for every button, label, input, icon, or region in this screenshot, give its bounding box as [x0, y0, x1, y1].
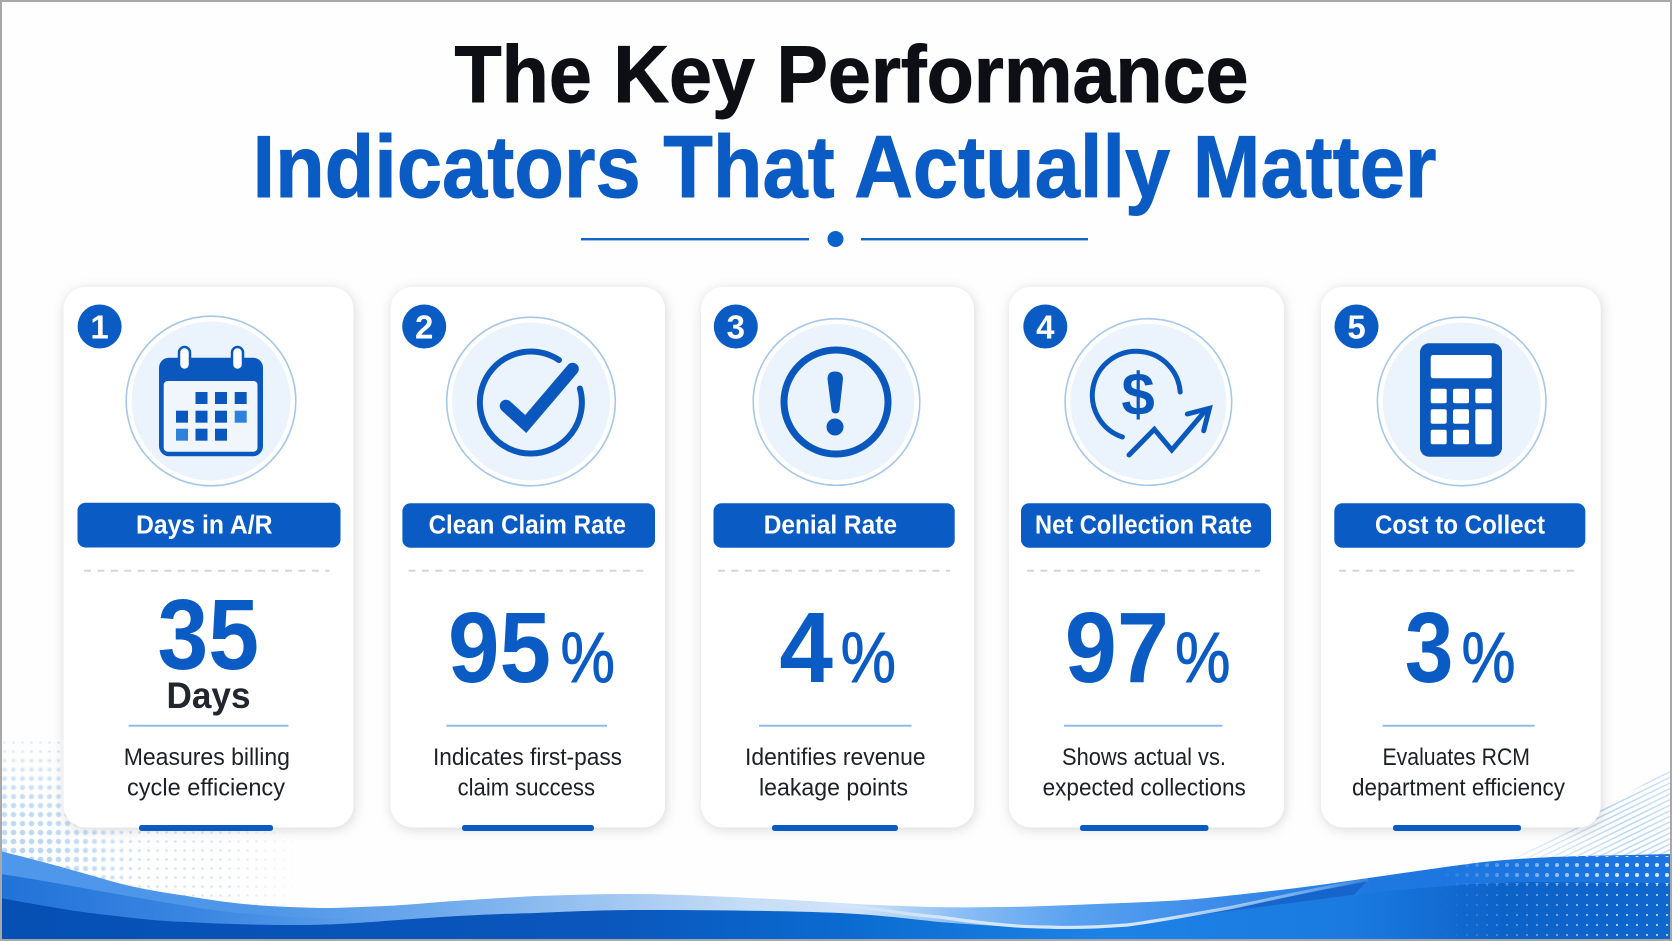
number badge 3: 3	[727, 308, 745, 346]
description: expected collections	[1043, 775, 1246, 802]
metric: 95%: %	[560, 619, 615, 698]
description: cycle efficiency	[127, 775, 285, 802]
label pill: Denial Rate	[714, 503, 955, 548]
number badge 2	[402, 304, 446, 348]
label pill: Net Collection Rate	[1021, 503, 1271, 548]
label pill: Cost to Collect: Cost to Collect	[1375, 512, 1545, 540]
mesh pattern: lower right	[1515, 768, 1672, 858]
description: Measures billing	[124, 744, 290, 771]
label pill: Days in A/R	[78, 503, 340, 548]
icon: calculator	[1377, 317, 1546, 486]
metric: 3%: %	[1462, 619, 1516, 698]
title divider	[581, 231, 1088, 247]
number badge 3	[714, 304, 758, 348]
metric: 3%	[1405, 592, 1516, 704]
icon: dollar with rising arrow	[1065, 319, 1232, 485]
panel: Clean Claim Rate	[390, 287, 665, 831]
icon: dollar with rising arrow: $	[1121, 361, 1155, 428]
number badge 1: 1	[90, 308, 109, 346]
description: Identifies revenue	[745, 744, 926, 771]
metric: 4%: %	[841, 619, 896, 698]
number badge 5: 5	[1347, 308, 1366, 346]
metric: 95%	[448, 592, 615, 704]
label pill: Clean Claim Rate	[402, 503, 655, 548]
label pill: Days in A/R: Days in A/R	[136, 512, 272, 540]
panel: Net Collection Rate	[1009, 287, 1284, 831]
metric: 35 Days: 35	[158, 579, 259, 691]
metric: 4%	[779, 592, 896, 704]
panel: Denial Rate	[701, 287, 974, 831]
panel: Days in A/R	[64, 287, 354, 831]
accent bar	[139, 825, 273, 831]
icon: check mark	[447, 317, 615, 486]
metric: 4%: 4	[779, 592, 833, 704]
description	[124, 744, 290, 802]
halftone dots: lower left	[2, 741, 284, 906]
title line 2: Indicators That Actually Matter	[252, 117, 1436, 216]
description: Indicates first-pass	[433, 744, 622, 771]
number badge 4: 4	[1036, 308, 1055, 346]
number badge 5	[1334, 304, 1378, 348]
number badge 1	[78, 304, 122, 348]
metric: 97%	[1065, 592, 1230, 704]
label pill: Cost to Collect	[1334, 503, 1585, 548]
label pill: Net Collection Rate: Net Collection Rate	[1035, 512, 1252, 540]
metric: 3%: 3	[1405, 592, 1453, 704]
icon: exclamation	[753, 319, 920, 485]
metric: 35 Days: Days	[166, 674, 250, 716]
metric: 97%: %	[1175, 619, 1230, 698]
title	[252, 30, 1436, 216]
label pill: Clean Claim Rate: Clean Claim Rate	[429, 512, 626, 540]
title line 1: The Key Performance	[454, 30, 1248, 120]
accent bar	[1080, 825, 1208, 831]
metric: 95%: 95	[448, 592, 551, 704]
description	[1043, 744, 1246, 802]
description	[745, 744, 926, 802]
description: Shows actual vs.	[1062, 744, 1226, 771]
panel: Cost to Collect	[1321, 287, 1601, 831]
accent bar	[462, 825, 594, 831]
number badge 2: 2	[415, 308, 433, 346]
number badge 4	[1023, 304, 1067, 348]
description: Evaluates RCM	[1382, 744, 1530, 771]
icon: calendar	[126, 316, 296, 486]
label pill: Denial Rate: Denial Rate	[764, 512, 897, 540]
metric: 97%: 97	[1065, 592, 1169, 704]
accent bar	[772, 825, 898, 831]
accent bar	[1393, 825, 1521, 831]
description	[433, 744, 622, 802]
bottom wave	[0, 851, 1672, 941]
description: claim success	[458, 775, 595, 802]
description	[1352, 744, 1565, 802]
description: department efficiency	[1352, 775, 1565, 802]
description: leakage points	[759, 775, 908, 802]
